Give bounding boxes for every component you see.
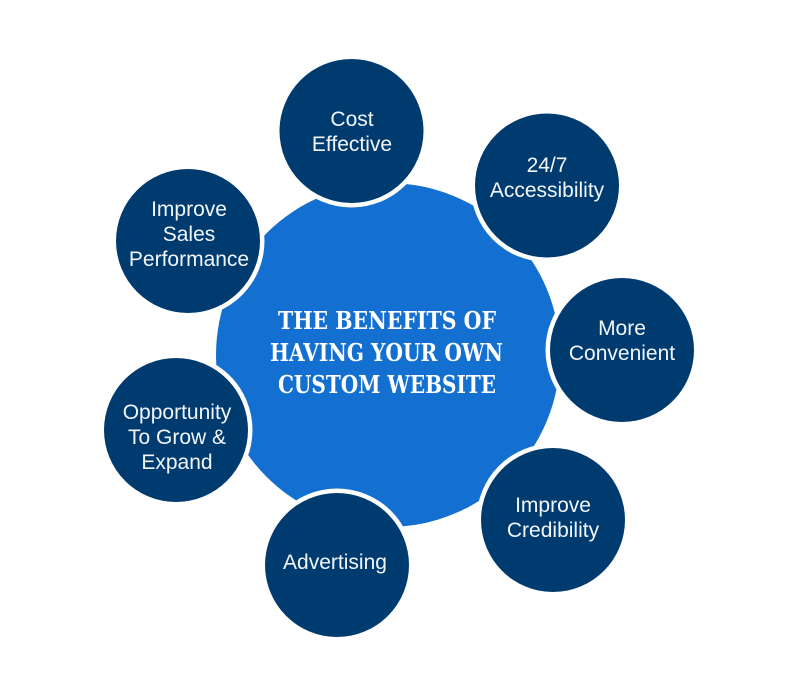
title: THE BENEFITS OF: [278, 306, 496, 335]
node: improve credibility: [476, 444, 630, 596]
node: opportunity to grow and expand: Opportunity: [123, 401, 232, 424]
node: cost effective: Cost: [330, 108, 374, 131]
title: CUSTOM WEBSITE: [278, 370, 496, 399]
title: HAVING YOUR OWN: [270, 338, 503, 367]
node: advertising: Advertising: [283, 551, 387, 574]
node: cost effective: Effective: [312, 133, 392, 156]
node: improve sales performance: Sales: [163, 223, 215, 246]
node: cost effective: [275, 54, 428, 208]
node: 24/7 accessibility: 24/7: [527, 154, 567, 177]
node: advertising: [260, 488, 414, 642]
node: improve credibility: Improve: [515, 494, 591, 517]
node: improve sales performance: Improve: [151, 198, 227, 221]
node: more convenient: [546, 274, 698, 426]
node: improve sales performance: [112, 164, 264, 318]
central circle: [216, 183, 560, 527]
node: more convenient: More: [598, 317, 646, 340]
node: improve credibility: Credibility: [507, 519, 600, 542]
node: improve sales performance: Performance: [129, 248, 249, 271]
node: more convenient: Convenient: [569, 342, 675, 365]
node: opportunity to grow and expand: Expand: [141, 451, 213, 474]
node: 24/7 accessibility: Accessibility: [490, 179, 605, 202]
title: [270, 306, 503, 399]
node: 24/7 accessibility: [470, 109, 624, 262]
node: opportunity to grow and expand: [100, 354, 252, 506]
node: opportunity to grow and expand: To Grow &: [128, 426, 226, 449]
